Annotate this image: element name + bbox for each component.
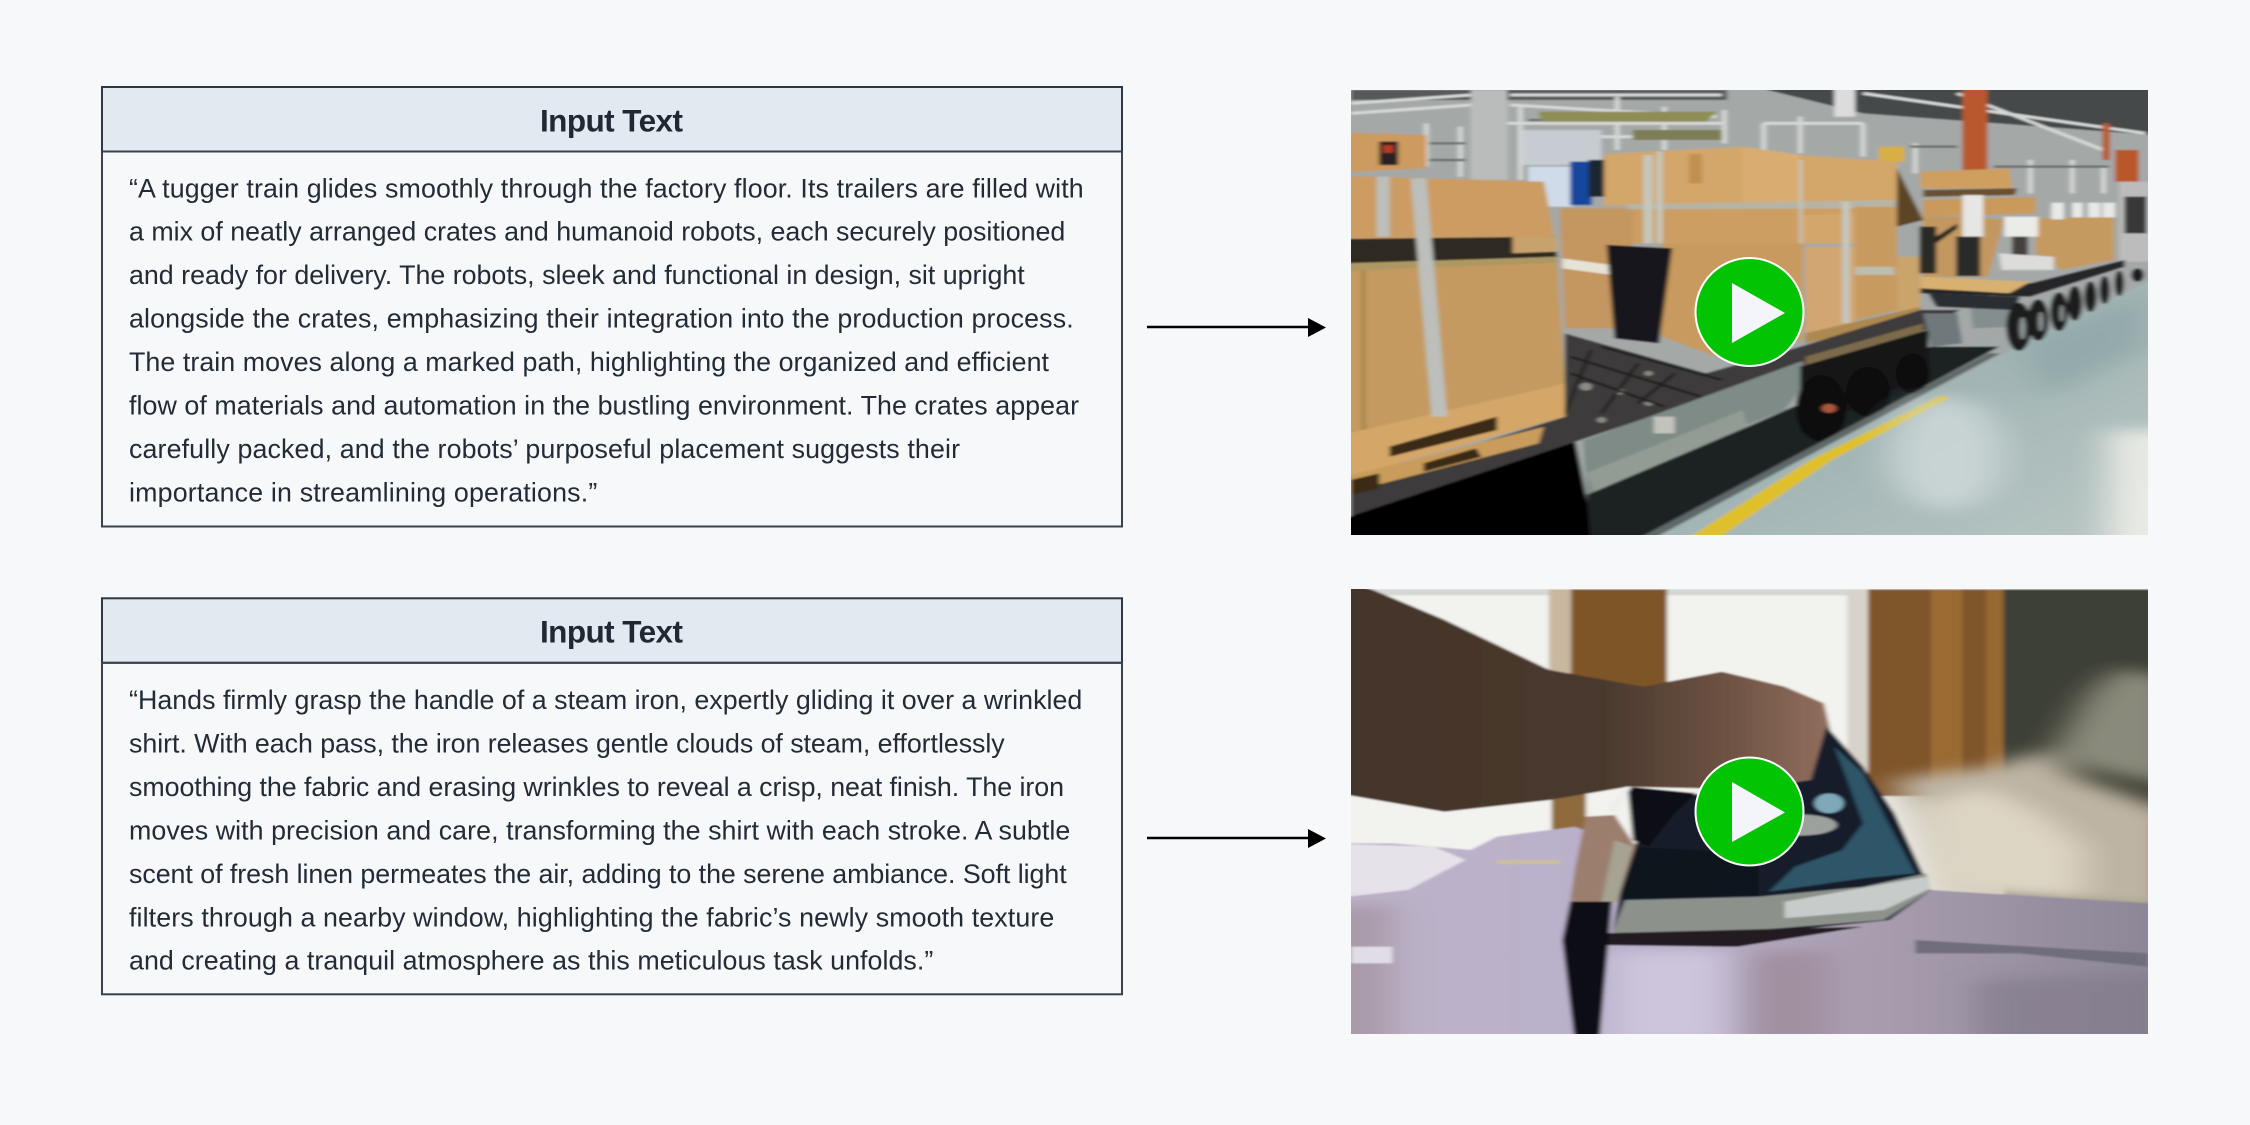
paragraph 1: The train moves along a marked path, highlighting the organized and efficient <box>129 347 1050 377</box>
heading 1: Input Text <box>540 102 684 138</box>
header band 1 <box>102 87 1122 152</box>
arrow 2 <box>1147 829 1326 848</box>
video frame: tugger train in factory <box>1351 90 2148 535</box>
paragraph 2: moves with precision and care, transforming the shirt with each stroke. A subtle <box>129 815 1070 845</box>
paragraph 1 <box>129 173 1084 507</box>
paragraph 2: filters through a nearby window, highlighting the fabric’s newly smooth texture <box>129 902 1054 932</box>
paragraph 2: shirt. With each pass, the iron releases gentle clouds of steam, effortlessly <box>129 728 1005 758</box>
body box 1 <box>102 152 1122 526</box>
paragraph 1: importance in streamlining operations.” <box>129 477 597 507</box>
panel: input text 2 <box>102 598 1122 994</box>
paragraph 1: carefully packed, and the robots’ purposeful placement suggests their <box>129 434 960 464</box>
paragraph 2 <box>129 685 1082 976</box>
paragraph 1: a mix of neatly arranged crates and humanoid robots, each securely positioned <box>129 217 1065 247</box>
arrow 1 <box>1147 318 1326 337</box>
heading 2: Input Text <box>540 613 684 649</box>
paragraph 2: “Hands firmly grasp the handle of a steam iron, expertly gliding it over a wrinkled <box>129 685 1082 715</box>
header band 2 <box>102 598 1122 663</box>
paragraph 1: flow of materials and automation in the bustling environment. The crates appear <box>129 390 1079 420</box>
paragraph 2: scent of fresh linen permeates the air, adding to the serene ambiance. Soft light <box>129 859 1067 889</box>
video frame: steam iron on shirt <box>1351 589 2148 1034</box>
play button 1 <box>1696 258 1804 366</box>
paragraph 1: and ready for delivery. The robots, sleek and functional in design, sit upright <box>129 260 1025 290</box>
body box 2 <box>102 663 1122 994</box>
paragraph 2: smoothing the fabric and erasing wrinkles to reveal a crisp, neat finish. The iron <box>129 772 1064 802</box>
paragraph 2: and creating a tranquil atmosphere as this meticulous task unfolds.” <box>129 946 933 976</box>
panel: input text 1 <box>102 87 1122 526</box>
play button 2 <box>1696 758 1804 866</box>
paragraph 1: alongside the crates, emphasizing their integration into the production process. <box>129 304 1074 334</box>
paragraph 1: “A tugger train glides smoothly through the factory floor. Its trailers are filled with <box>129 173 1084 203</box>
